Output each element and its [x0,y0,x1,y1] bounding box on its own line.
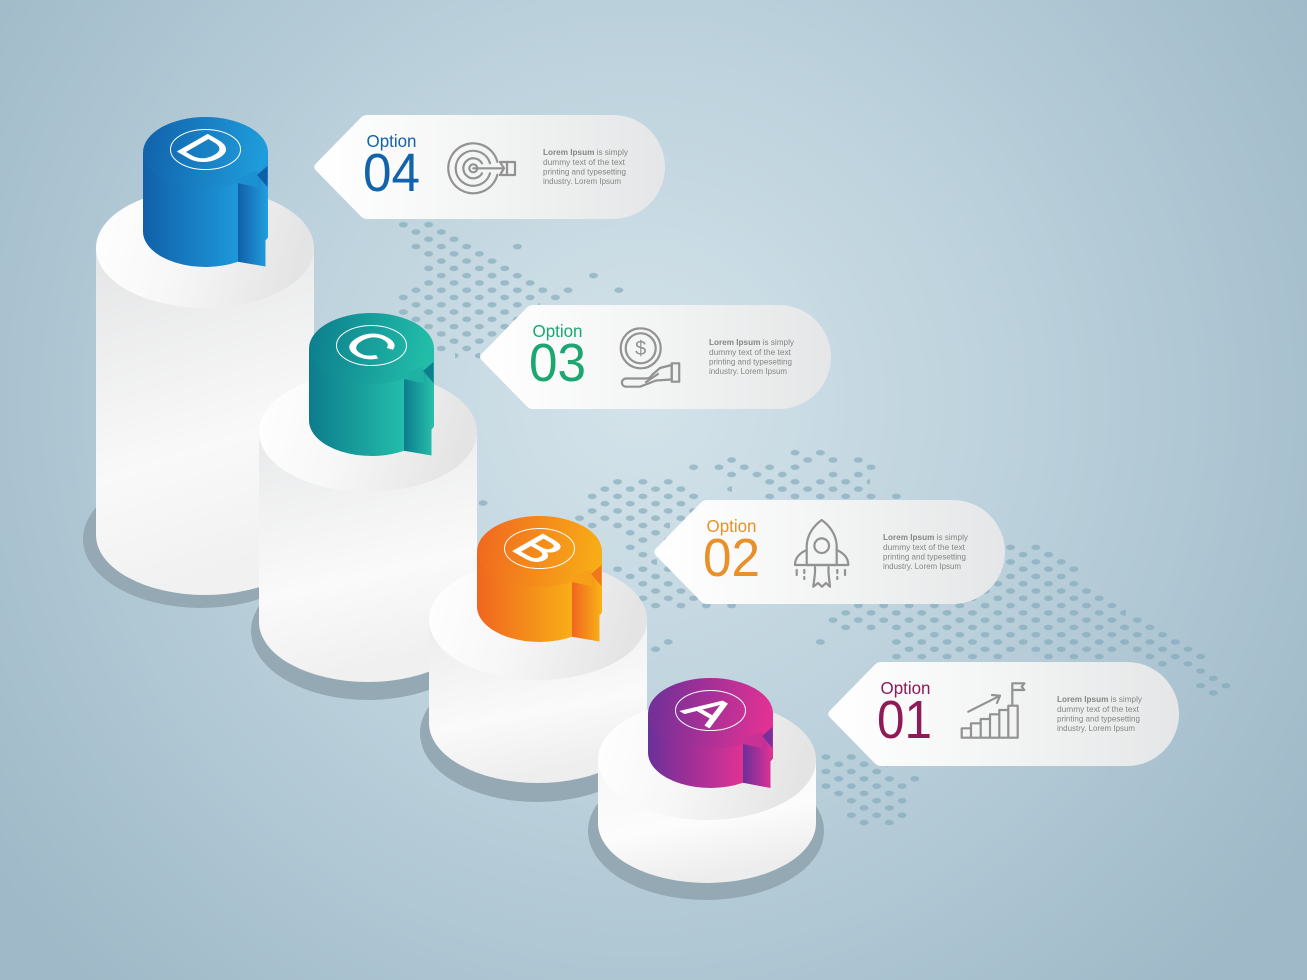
option 04 description: Lorem Ipsum is simply [543,147,629,157]
option 04 label: Option [366,131,416,151]
option 02 number: 02 [703,528,760,588]
option 01 description: Lorem Ipsum is simply [1057,694,1143,704]
option 01 description: printing and typesetting [1057,714,1140,724]
option 01 label: Option [880,678,930,698]
option 04 description [543,147,629,186]
option 04 description: industry. Lorem Ipsum [543,176,621,186]
teal cap C: C [331,323,411,369]
option 02 description: industry. Lorem Ipsum [883,561,961,571]
card: option 04 [314,115,665,219]
icon: coin over hand: $ [635,338,646,360]
option 03 label: Option [532,321,582,341]
orange cap B: B [500,527,577,571]
blue cap D [143,117,268,267]
option 03 description [709,337,795,376]
option 02 description [883,532,969,571]
option 04 description: dummy text of the text [543,157,626,167]
purple cap A [648,678,773,788]
option 02 description: Lorem Ipsum is simply [883,532,969,542]
orange cap B [477,516,602,642]
icon: rocket [795,520,848,587]
option 02 label: Option [706,516,756,536]
option 04 description: printing and typesetting [543,166,626,176]
teal cap C [309,313,434,456]
option 04 number: 04 [363,143,420,203]
card: option 03 [480,305,831,409]
option 01 number: 01 [877,690,932,750]
option 03 description: printing and typesetting [709,356,792,366]
white column C [259,372,477,682]
purple cap A: A [671,689,749,734]
card: option 02 [654,500,1005,604]
option 01 description: dummy text of the text [1057,704,1140,714]
option 01 description: industry. Lorem Ipsum [1057,723,1135,733]
card: option 01 [828,662,1179,766]
option 03 description: Lorem Ipsum is simply [709,337,795,347]
cylinder shadows [83,470,824,900]
option 02 description: dummy text of the text [883,542,966,552]
option 03 description: industry. Lorem Ipsum [709,366,787,376]
white column B [429,560,647,783]
icon: rising bars with flag [962,683,1024,738]
white column D [96,188,314,595]
option 01 description [1057,694,1143,733]
icon: target with arrow [448,143,515,193]
blue cap D: D [165,127,245,173]
icon: coin over hand [621,328,679,387]
option 03 number: 03 [529,333,586,393]
option 02 description: printing and typesetting [883,552,966,562]
white column A [598,700,816,883]
dotted world map [393,221,1241,826]
option 03 description: dummy text of the text [709,347,792,357]
